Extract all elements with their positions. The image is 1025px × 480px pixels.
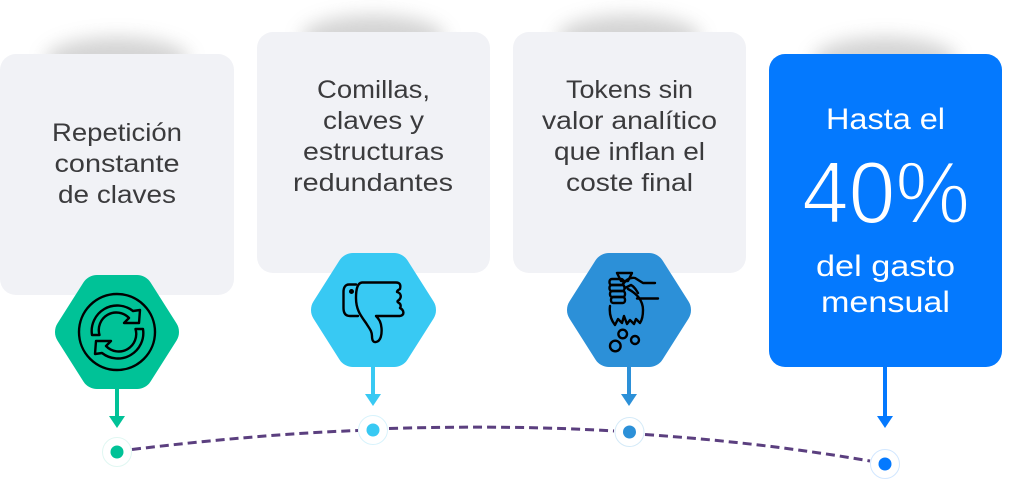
arrow: green (109, 389, 125, 428)
text: hasta el: Hasta el (826, 103, 945, 136)
timeline dot: mid blue (615, 418, 644, 446)
text: del gasto mensual (816, 250, 955, 319)
big number: 40%: 40% (802, 143, 970, 242)
text: repeated keys: constante (54, 150, 180, 178)
text: redundant structures: Comillas, (317, 76, 430, 104)
timeline dot: green (102, 438, 132, 466)
panel: redundant structures (257, 15, 490, 273)
icon: hand dropping coins (610, 273, 658, 351)
panel: repeated keys (0, 37, 234, 295)
text: repeated keys: de claves (58, 181, 176, 209)
timeline dot: sky blue (358, 416, 388, 444)
text: del gasto mensual: del gasto (816, 250, 955, 283)
icon: refresh (79, 294, 155, 370)
text: repeated keys (52, 119, 182, 209)
text: redundant structures: estructuras (303, 138, 444, 166)
timeline dot: bright blue (870, 450, 900, 478)
text: tokens without value: Tokens sin (566, 76, 693, 104)
hexagon: sky blue with thumbs-down icon (327, 269, 420, 351)
text: tokens without value: coste final (566, 169, 693, 197)
text: tokens without value (542, 76, 717, 197)
text: redundant structures (293, 76, 453, 197)
panel: 40 percent highlight (769, 37, 1002, 367)
text: tokens without value: valor analítico (542, 107, 717, 135)
hexagon: green with refresh icon (71, 291, 163, 373)
arrow: bright blue (877, 367, 893, 428)
hexagon: mid blue with hand and bag icon (583, 269, 675, 351)
text: repeated keys: Repetición (52, 119, 182, 147)
dashed timeline curve (132, 427, 870, 461)
arrow: mid blue (621, 367, 637, 406)
panel: tokens without value (513, 15, 746, 273)
text: tokens without value: que inflan el (554, 138, 705, 166)
arrow: sky blue (365, 367, 381, 406)
text: redundant structures: claves y (323, 107, 425, 135)
icon: thumbs down (344, 282, 403, 342)
text: del gasto mensual: mensual (821, 286, 950, 319)
text: redundant structures: redundantes (293, 169, 453, 197)
